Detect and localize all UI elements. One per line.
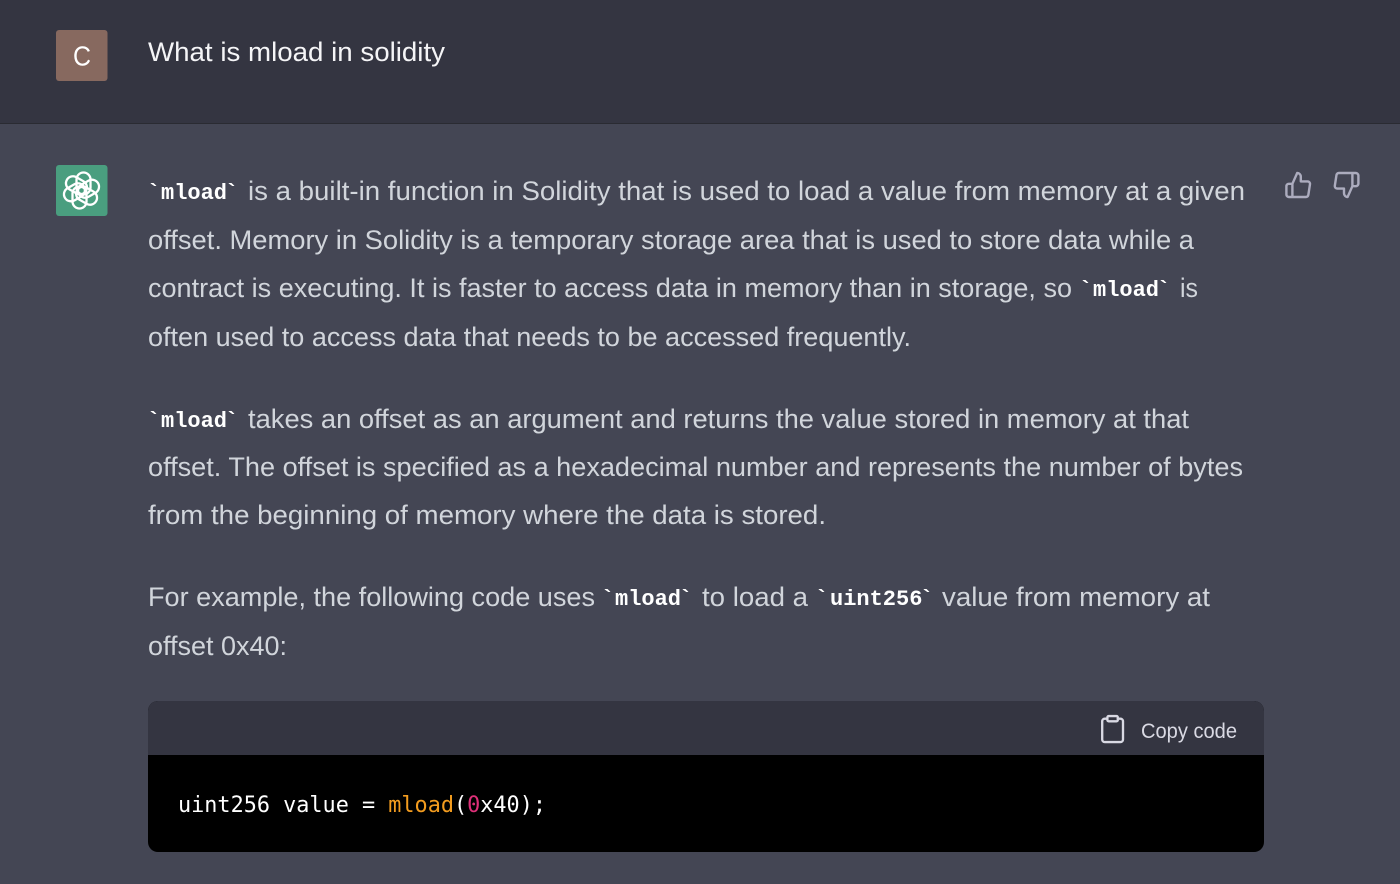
text block: paragraph 2: `mload` <box>147 409 238 434</box>
text block: paragraph 2: from the beginning of memory where the data is stored. <box>148 500 826 530</box>
text block: paragraph 3: to load a <box>702 582 809 612</box>
icon: thumbs up <box>1286 173 1310 197</box>
text block: paragraph 1: often used to access data that needs to be accessed frequently. <box>148 322 911 352</box>
text block: paragraph 3: value from memory at <box>942 582 1211 612</box>
copy code label: Copy code <box>1141 720 1237 743</box>
icon: assistant logo <box>56 165 108 216</box>
text block: paragraph 1: is <box>1180 273 1198 303</box>
code line: uint256 value = mload(0x40); <box>178 793 546 818</box>
text block: paragraph 3 <box>148 582 1211 661</box>
text block: paragraph 2: offset. The offset is specified as a hexadecimal number and represents the number of bytes <box>148 452 1243 482</box>
icon: user avatar: C <box>73 40 91 72</box>
panel: code block <box>148 701 1264 852</box>
text block: paragraph 2: takes an offset as an argument and returns the value stored in memory at that <box>248 404 1189 434</box>
text block: paragraph 3: For example, the following code uses <box>148 582 595 612</box>
text block: paragraph 3: `uint256` <box>815 587 933 612</box>
text block: paragraph 1: offset. Memory in Solidity is a temporary storage area that is used to store data while a <box>148 225 1195 255</box>
text block: paragraph 1: `mload` <box>1079 278 1170 303</box>
text block: paragraph 2 <box>147 404 1243 530</box>
panel: user question <box>0 0 1400 124</box>
text block: paragraph 1 <box>147 176 1245 352</box>
text block: paragraph 1: contract is executing. It is faster to access data in memory than in storage, so <box>148 273 1072 303</box>
text block: paragraph 3: offset 0x40: <box>148 631 287 661</box>
icon: thumbs down <box>1335 173 1358 197</box>
icon: clipboard <box>1102 716 1123 742</box>
text block: paragraph 3: `mload` <box>601 587 692 612</box>
text block: paragraph 1: `mload` <box>147 181 238 206</box>
text block: paragraph 1: is a built-in function in Solidity that is used to load a value from memory at a given <box>248 176 1245 206</box>
icon: user avatar <box>56 30 108 81</box>
question text: What is mload in solidity <box>148 37 446 67</box>
